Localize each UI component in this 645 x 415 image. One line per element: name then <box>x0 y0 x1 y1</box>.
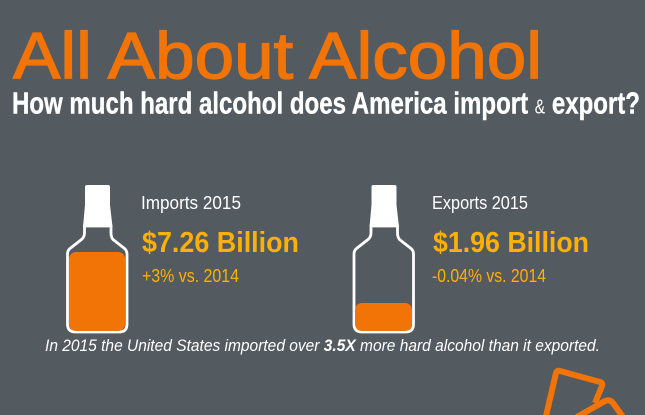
imports change: +3% vs. 2014 <box>142 266 239 286</box>
icon: exports bottle <box>354 185 414 332</box>
caption: In 2015 the United States imported over 3.5X more hard alcohol than it exported. <box>45 337 600 355</box>
icon: imports bottle <box>68 185 127 332</box>
exports change: -0.04% vs. 2014 <box>432 266 546 286</box>
imports label: Imports 2015 <box>141 193 241 213</box>
imports text block <box>141 193 299 286</box>
exports value: $1.96 Billion <box>433 227 589 259</box>
icon: cropped orange shapes <box>546 371 623 415</box>
imports value: $7.26 Billion <box>142 227 299 259</box>
exports text block <box>432 193 589 286</box>
exports label: Exports 2015 <box>432 193 528 213</box>
title: All About Alcohol <box>13 18 542 92</box>
